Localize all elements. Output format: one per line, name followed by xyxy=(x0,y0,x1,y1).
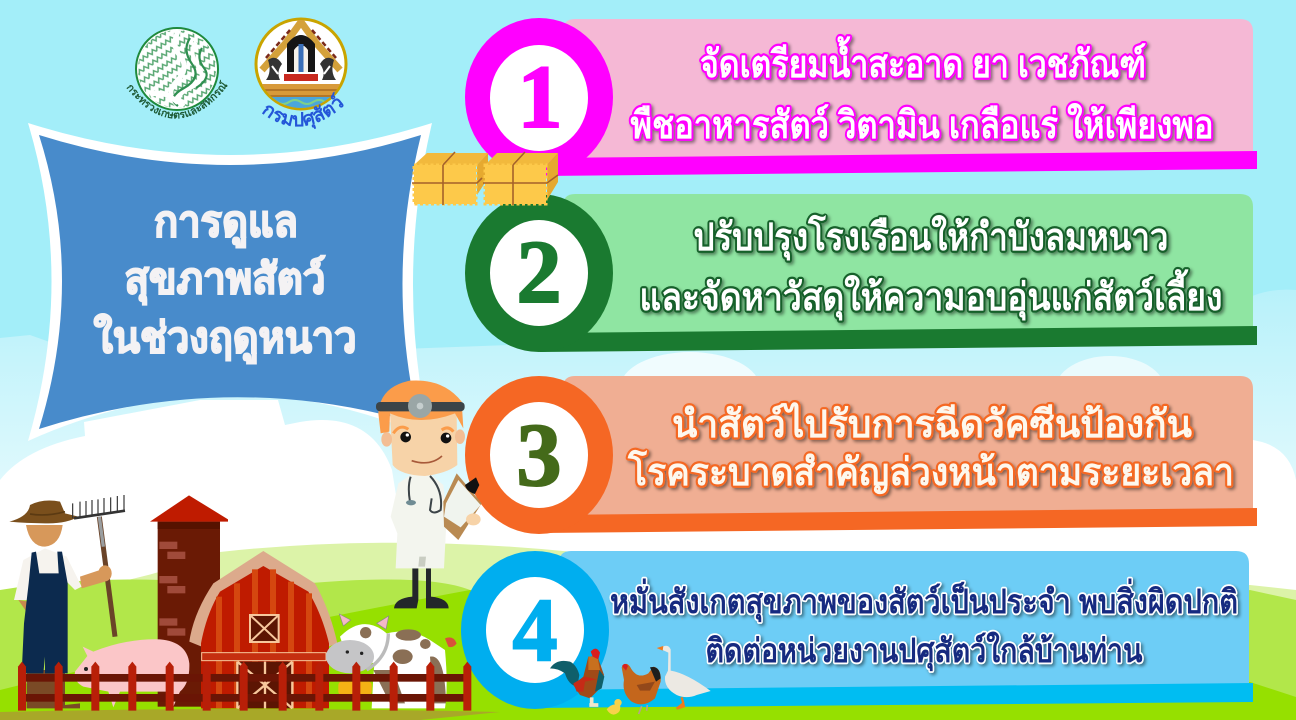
step 2 text: ปรับปรุงโรงเรือนให้กำบังลมหนาว xyxy=(694,214,1168,261)
farmer xyxy=(9,495,125,708)
number 3: 3 xyxy=(516,406,562,505)
icon: goose xyxy=(657,646,711,709)
step 1 text: จัดเตรียมน้ำสะอาด ยา เวชภัณฑ์ xyxy=(700,36,1146,86)
step 4 text: ติดต่อหน่วยงานปศุสัตว์ใกล้บ้านท่าน xyxy=(706,631,1143,672)
step 1 text: พืชอาหารสัตว์ วิตามิน เกลือแร่ ให้เพียงพอ xyxy=(630,103,1214,147)
fence xyxy=(18,662,471,711)
panel: step 3 xyxy=(465,376,1257,534)
pig xyxy=(75,639,189,707)
title text: การดูแล xyxy=(154,198,298,248)
step 3 text xyxy=(627,402,1234,494)
title text: ในช่วงฤดูหนาว xyxy=(94,313,356,364)
step 3 text: นำสัตว์ไปรับการฉีดวัคซีนป้องกัน xyxy=(672,402,1192,446)
step 3 text: โรคระบาดสำคัญล่วงหน้าตามระยะเวลา xyxy=(627,449,1234,494)
step 2 text xyxy=(640,214,1222,321)
poultry group xyxy=(550,646,711,715)
panel: step 4 xyxy=(461,551,1253,709)
number 2: 2 xyxy=(516,223,562,322)
rake xyxy=(73,495,125,637)
icon: hen xyxy=(622,664,661,714)
logo: ministry of agriculture seal xyxy=(126,27,228,119)
number 1: 1 xyxy=(518,48,562,147)
icon: rooster xyxy=(550,649,604,705)
step 2 text: และจัดหาวัสดุให้ความอบอุ่นแก่สัตว์เลี้ยง xyxy=(640,269,1222,321)
title text xyxy=(94,198,356,364)
logo: department of livestock development seal: กรมปศุสัตว์ xyxy=(262,92,344,129)
silo xyxy=(150,495,228,707)
logo: ministry of agriculture seal: กระทรวงเกษตรและสหกรณ์ xyxy=(126,80,228,119)
title banner xyxy=(28,123,432,441)
illustration: farm scene xyxy=(9,380,482,711)
title text: สุขภาพสัตว์ xyxy=(124,255,326,305)
panel: step 2 xyxy=(465,194,1257,352)
step 1 text xyxy=(630,36,1214,147)
barn xyxy=(189,551,337,708)
logo: department of livestock development seal xyxy=(254,18,348,129)
panel: step 1 xyxy=(465,18,1257,176)
doctor xyxy=(376,380,482,608)
cow xyxy=(326,614,457,708)
icon: chick xyxy=(607,699,622,715)
number 4: 4 xyxy=(512,581,558,680)
icon: hay bales xyxy=(412,152,558,205)
step 4 text xyxy=(610,578,1238,672)
